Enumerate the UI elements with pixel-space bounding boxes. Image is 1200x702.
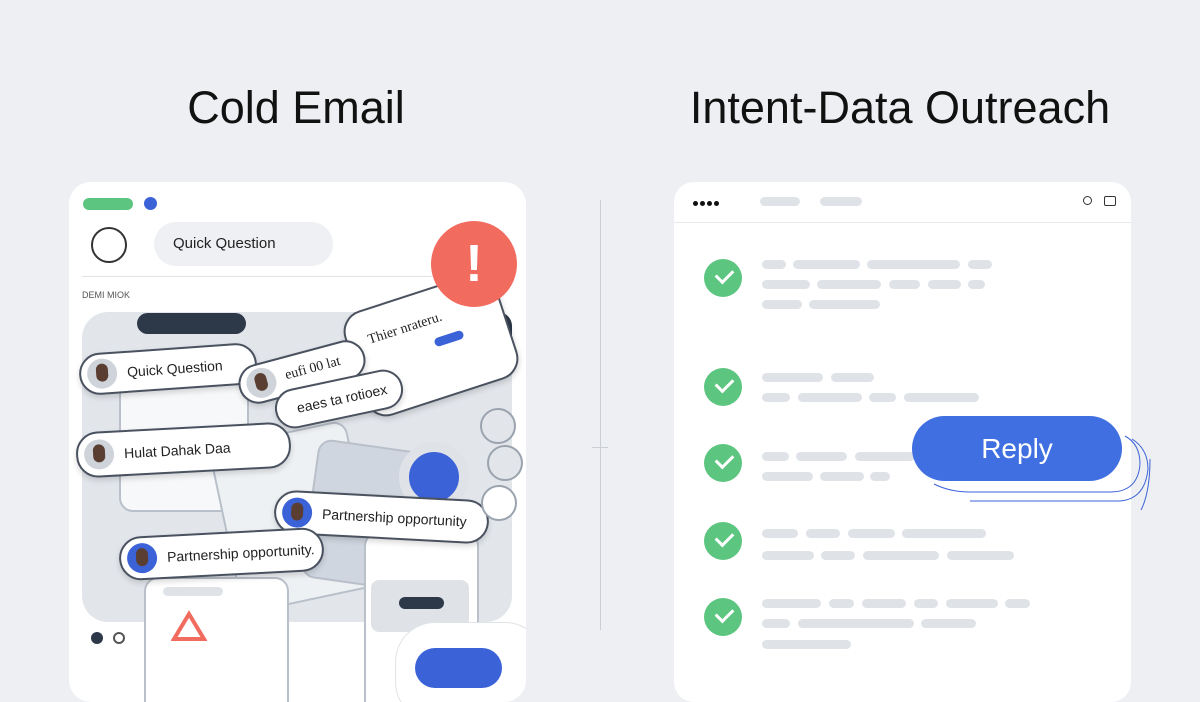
- reply button: Reply: [981, 433, 1053, 464]
- panel: cold email: Partnership opportunity: [322, 506, 467, 529]
- cards: email chips: Quick Question: [127, 357, 223, 380]
- row 3: [704, 444, 742, 482]
- row 1: [704, 259, 742, 297]
- row 5: [704, 598, 742, 636]
- gray collage area: [82, 312, 512, 622]
- panel: cold email: eufi 00 lat: [284, 354, 342, 383]
- title: intent-data outreach: Intent-Data Outreach: [690, 82, 1110, 133]
- panel: cold email: [69, 182, 526, 702]
- background sheets: [119, 377, 249, 512]
- divider: [600, 200, 601, 630]
- title: cold email: Cold Email: [187, 82, 405, 133]
- row 4: [704, 522, 742, 560]
- header: [693, 201, 698, 206]
- subject pill: [154, 222, 333, 266]
- inbox label: DEMI MIOK: [82, 290, 130, 300]
- bottom dots: [91, 632, 103, 644]
- icon: warning triangle: [171, 610, 207, 641]
- card: there notes: [338, 268, 524, 422]
- header pills: [83, 198, 133, 210]
- panel: cold email: Hulat Dahak Daa: [124, 440, 231, 461]
- reply button: [912, 416, 1150, 510]
- list rows: [704, 259, 1030, 649]
- panel: intent-data outreach: [674, 182, 1131, 702]
- side icons: [480, 408, 516, 444]
- panel: cold email: eaes ta rotioex: [295, 381, 388, 416]
- bottom blue button: [395, 622, 545, 702]
- subject pill: Quick Question: [173, 235, 276, 252]
- row 2: [704, 368, 742, 406]
- card: there notes: Thier nrateru.: [366, 310, 444, 348]
- icon: red alert: [431, 221, 517, 307]
- icon: contact: [91, 227, 127, 263]
- cards: email chips: [78, 342, 258, 396]
- panel: cold email: Partnership opportunity.: [167, 541, 315, 565]
- icon: red alert: !: [465, 235, 483, 293]
